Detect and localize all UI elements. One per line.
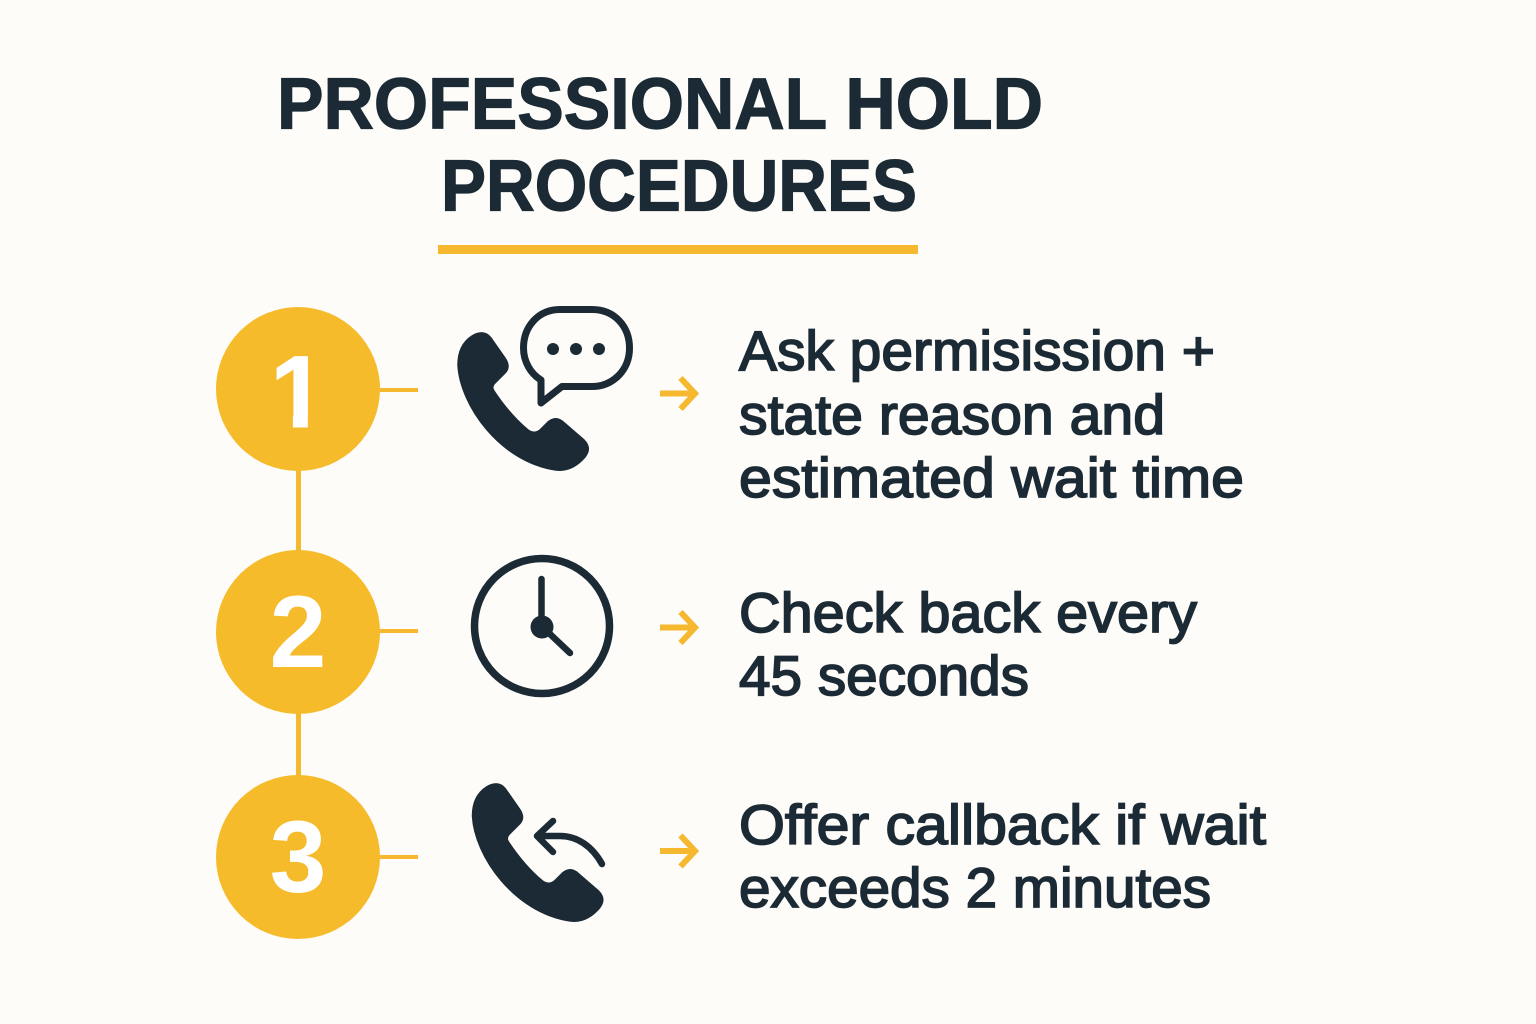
- step 1 text: [739, 319, 1244, 509]
- infographic canvas: [216, 77, 1266, 939]
- step 2 text: [739, 581, 1197, 707]
- step 3 text: exceeds 2 minutes: [739, 856, 1211, 919]
- step 1 text: Ask permisission +: [739, 319, 1215, 382]
- step 1 number badge: 1: [270, 335, 327, 449]
- arrow 3: [660, 836, 695, 866]
- step 1: [216, 307, 1244, 509]
- step 2 text: 45 seconds: [739, 644, 1029, 707]
- step 1 text: estimated wait time: [739, 446, 1244, 509]
- step 2 text: Check back every: [739, 581, 1197, 644]
- title: [277, 64, 1043, 226]
- arrow 1: [660, 378, 695, 409]
- icon: phone with speech bubble: [458, 310, 630, 470]
- step 2 number badge: 2: [270, 575, 326, 689]
- icon: clock: [474, 558, 610, 694]
- title: PROFESSIONAL HOLD: [277, 64, 1043, 144]
- timeline connector: [296, 460, 301, 790]
- title: PROCEDURES: [441, 146, 917, 226]
- step 1 number badge: [216, 307, 418, 471]
- step 2: [216, 550, 1197, 714]
- title underline: [438, 245, 918, 254]
- step 1 text: state reason and: [739, 383, 1165, 446]
- step 3: [216, 775, 1266, 939]
- step 3 number badge: [216, 775, 418, 939]
- step 2 number badge: [216, 550, 418, 714]
- arrow 2: [660, 612, 695, 643]
- step 3 number badge: 3: [270, 800, 326, 914]
- step 3 text: [739, 793, 1266, 919]
- icon: phone with callback arrow: [472, 784, 603, 921]
- step 3 text: Offer callback if wait: [739, 793, 1266, 856]
